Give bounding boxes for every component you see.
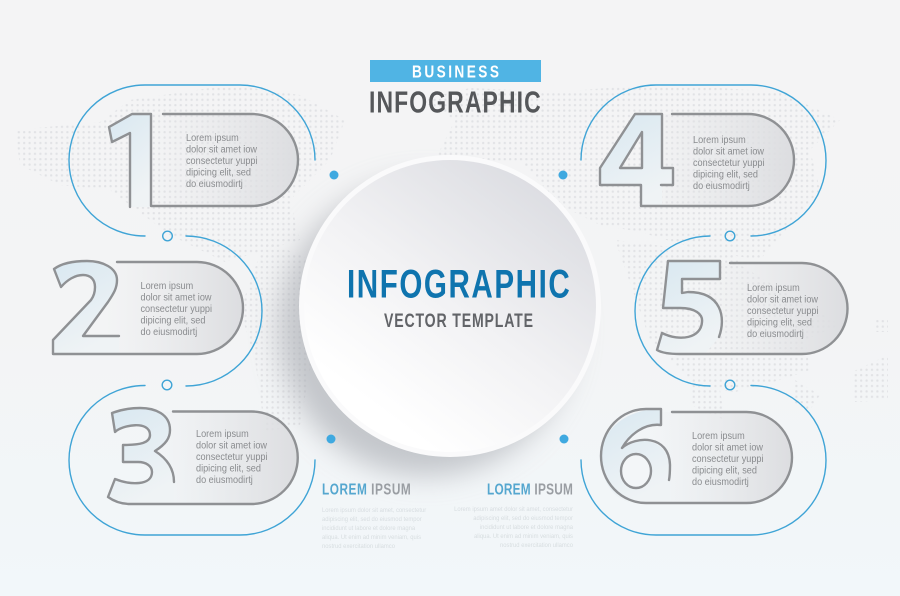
panel 2 bbox=[53, 261, 243, 354]
ring node 1-2 bbox=[163, 231, 172, 241]
caption left heading: LOREM IPSUM bbox=[322, 480, 411, 498]
caption right body: adipiscing elit, sed do eiusmod tempor bbox=[473, 515, 573, 522]
numeral 4 bbox=[600, 114, 673, 206]
outline 2 bbox=[186, 236, 262, 386]
text block 5: dolor sit amet iow bbox=[747, 294, 819, 306]
caption right bbox=[454, 480, 573, 549]
text block 1: Lorem ipsum bbox=[186, 132, 239, 144]
text block 6: consectetur yuppi bbox=[692, 453, 764, 465]
panel 4 bbox=[600, 114, 794, 206]
panel 5 bbox=[657, 261, 848, 354]
outline 3 bbox=[69, 386, 315, 535]
text block 2: dipicing elit, sed bbox=[140, 315, 205, 327]
caption left body: adipiscing elit, sed do eiusmod tempor bbox=[322, 516, 422, 523]
pill shading 6 bbox=[650, 412, 792, 503]
text block 4: do eiusmodirtj bbox=[693, 180, 750, 192]
caption left body: aliqua. Ut enim ad minim veniam, quis bbox=[322, 534, 421, 541]
outline 6 bbox=[581, 386, 826, 535]
text block 5: consectetur yuppi bbox=[747, 305, 819, 317]
circle title: INFOGRAPHIC bbox=[347, 262, 570, 307]
outline of numeral and pill 1 bbox=[109, 114, 298, 207]
caption left body: nostrud exercitation ullamco bbox=[322, 543, 395, 550]
text block 5: dipicing elit, sed bbox=[747, 317, 812, 329]
header title: INFOGRAPHIC bbox=[369, 84, 541, 119]
pill shading 4 bbox=[641, 114, 794, 206]
outline 4 bbox=[581, 85, 826, 236]
text block 2: dolor sit amet iow bbox=[140, 292, 212, 304]
circle white rim bbox=[299, 155, 601, 457]
circle drop shadow bbox=[278, 180, 574, 476]
ring node 5-6 bbox=[725, 380, 735, 390]
dot bottom left bbox=[326, 434, 336, 444]
text block 1: dipicing elit, sed bbox=[186, 167, 251, 179]
pill shading 1 bbox=[151, 114, 298, 206]
ring node 2-3 bbox=[162, 380, 172, 390]
caption right body: incididunt ut labore et dolore magna bbox=[480, 524, 573, 531]
text block 3: consectetur yuppi bbox=[196, 451, 268, 463]
blue connector outlines bbox=[69, 85, 826, 535]
outline of numeral and pill 2 bbox=[53, 261, 243, 354]
pill shading 2 bbox=[105, 262, 243, 354]
text block 2: consectetur yuppi bbox=[140, 303, 212, 315]
text block 6: Lorem ipsum bbox=[692, 430, 745, 442]
numeral 5 bbox=[657, 261, 722, 354]
dotted world map bbox=[15, 85, 888, 432]
outline of numeral and pill 3 bbox=[108, 408, 298, 504]
caption right heading: LOREM IPSUM bbox=[487, 480, 573, 498]
caption left bbox=[322, 480, 426, 550]
text block 2: do eiusmodirtj bbox=[140, 326, 197, 338]
header blue band bbox=[370, 60, 541, 82]
text block 6: dolor sit amet iow bbox=[692, 442, 764, 454]
caption left body: Lorem ipsum dolor sit amet, consectetur bbox=[322, 507, 426, 514]
caption right body: aliqua. Ut enim ad minim veniam, quis bbox=[474, 533, 573, 540]
header bbox=[369, 60, 541, 119]
outline of numeral and pill 6 bbox=[601, 409, 792, 503]
central circle bbox=[278, 155, 601, 476]
text block 1: do eiusmodirtj bbox=[186, 178, 243, 190]
dot top left bbox=[330, 170, 338, 180]
numeral 6 bbox=[601, 409, 670, 503]
numeral 2 bbox=[53, 261, 119, 354]
dot top right bbox=[558, 170, 568, 180]
outline of numeral and pill 4 bbox=[600, 114, 794, 206]
text block 4: dolor sit amet iow bbox=[693, 146, 765, 158]
ring node 4-5 bbox=[725, 231, 735, 241]
dot bottom right bbox=[560, 434, 568, 444]
outline of numeral and pill 5 bbox=[657, 261, 848, 354]
caption right body: nostrud exercitation ullamco bbox=[500, 542, 573, 549]
text block 5: do eiusmodirtj bbox=[747, 328, 804, 340]
text block 4: dipicing elit, sed bbox=[693, 169, 758, 181]
caption left body: incididunt ut labore et dolore magna bbox=[322, 525, 416, 532]
text block 3: do eiusmodirtj bbox=[196, 474, 253, 486]
numeral 4 counter bbox=[620, 132, 642, 168]
pill shading 5 bbox=[700, 263, 848, 354]
text block 4: consectetur yuppi bbox=[693, 157, 765, 169]
header label: BUSINESS bbox=[412, 63, 499, 82]
text block 3: dolor sit amet iow bbox=[196, 440, 268, 452]
text block 1: consectetur yuppi bbox=[186, 155, 258, 167]
circle face bbox=[304, 160, 596, 452]
text block 2: Lorem ipsum bbox=[140, 280, 193, 292]
outline 1 bbox=[69, 85, 315, 236]
text block 5: Lorem ipsum bbox=[747, 282, 800, 294]
text block 4: Lorem ipsum bbox=[693, 134, 746, 146]
pill shading 3 bbox=[150, 412, 298, 504]
numeral 3 bbox=[108, 408, 174, 504]
panel 6 bbox=[601, 409, 792, 503]
numeral 1 bbox=[109, 114, 151, 207]
text block 6: do eiusmodirtj bbox=[692, 476, 749, 488]
numeral 6 counter bbox=[621, 454, 651, 488]
circle subtitle: VECTOR TEMPLATE bbox=[384, 310, 533, 332]
text block 1: dolor sit amet iow bbox=[186, 144, 258, 156]
caption right body: Lorem ipsum amet dolor sit amet, consectetur bbox=[454, 506, 573, 513]
text block 3: Lorem ipsum bbox=[196, 428, 249, 440]
outline 5 bbox=[635, 236, 710, 386]
text block 3: dipicing elit, sed bbox=[196, 463, 261, 475]
panel 3 bbox=[108, 408, 298, 504]
panel 1 bbox=[109, 114, 298, 207]
text block 6: dipicing elit, sed bbox=[692, 465, 757, 477]
